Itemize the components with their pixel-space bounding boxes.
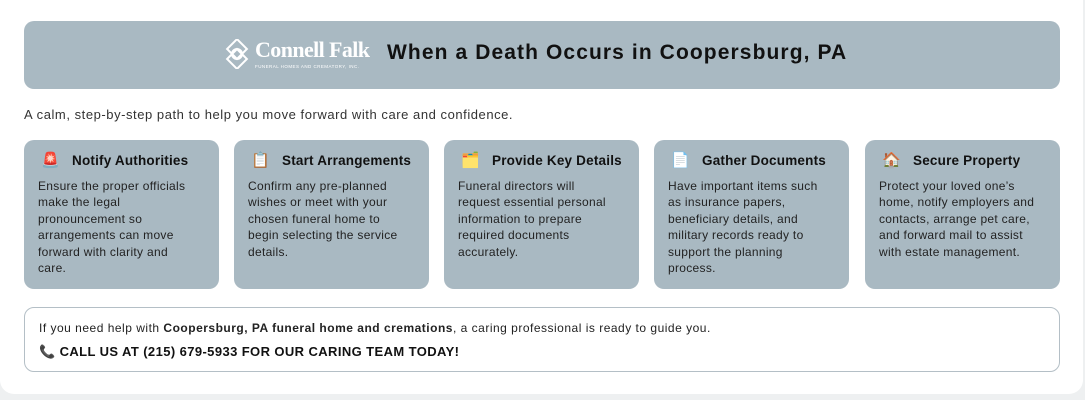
logo: Connell Falk — [255, 37, 369, 62]
card: notify authorities: 🚨 — [41, 152, 60, 169]
call to action box: If you need help with Coopersburg, PA funeral home and cremations, a caring professional is ready to guide you. — [39, 321, 711, 335]
card: provide key details: Provide Key Details — [492, 153, 622, 168]
card: provide key details: Funeral directors will request essential personal information to prepare required documents accurately. — [458, 179, 606, 259]
intro text: A calm, step-by-step path to help you move forward with care and confidence. — [24, 107, 513, 122]
card: notify authorities: Ensure the proper officials make the legal pronouncement so arrangements can move forward with clarity and care. — [38, 179, 185, 275]
logo — [226, 37, 370, 69]
card: notify authorities: Notify Authorities — [72, 153, 188, 168]
card: secure property: 🏠 — [882, 152, 901, 169]
card: gather documents: 📄 — [671, 152, 690, 169]
call to action box: 📞 CALL US AT (215) 679-5933 FOR OUR CARING TEAM TODAY! — [39, 344, 459, 359]
card: start arrangements: Confirm any pre-planned wishes or meet with your chosen funeral home to begin selecting the service details. — [248, 179, 398, 259]
card: provide key details — [444, 140, 639, 289]
icon: logo knot — [226, 39, 248, 69]
title: When a Death Occurs in Coopersburg, PA — [387, 41, 847, 64]
header banner — [24, 21, 1060, 89]
logo: FUNERAL HOMES AND CREMATORY, INC. — [255, 64, 359, 69]
card: secure property — [865, 140, 1060, 289]
call to action box — [24, 307, 1060, 372]
card: gather documents: Gather Documents — [702, 153, 826, 168]
card: start arrangements — [234, 140, 429, 289]
card: secure property: Secure Property — [913, 153, 1020, 168]
card: secure property: Protect your loved one’s home, notify employers and contacts, arrange pet care, and forward mail to assist with estate management. — [879, 179, 1034, 259]
card: notify authorities — [24, 140, 219, 289]
card: start arrangements: 📋 — [251, 152, 270, 169]
card: provide key details: 🗂️ — [461, 152, 480, 169]
card: gather documents — [654, 140, 849, 289]
card: start arrangements: Start Arrangements — [282, 153, 411, 168]
card: gather documents: Have important items such as insurance papers, beneficiary details, and military records ready to support the planning process. — [668, 179, 818, 275]
